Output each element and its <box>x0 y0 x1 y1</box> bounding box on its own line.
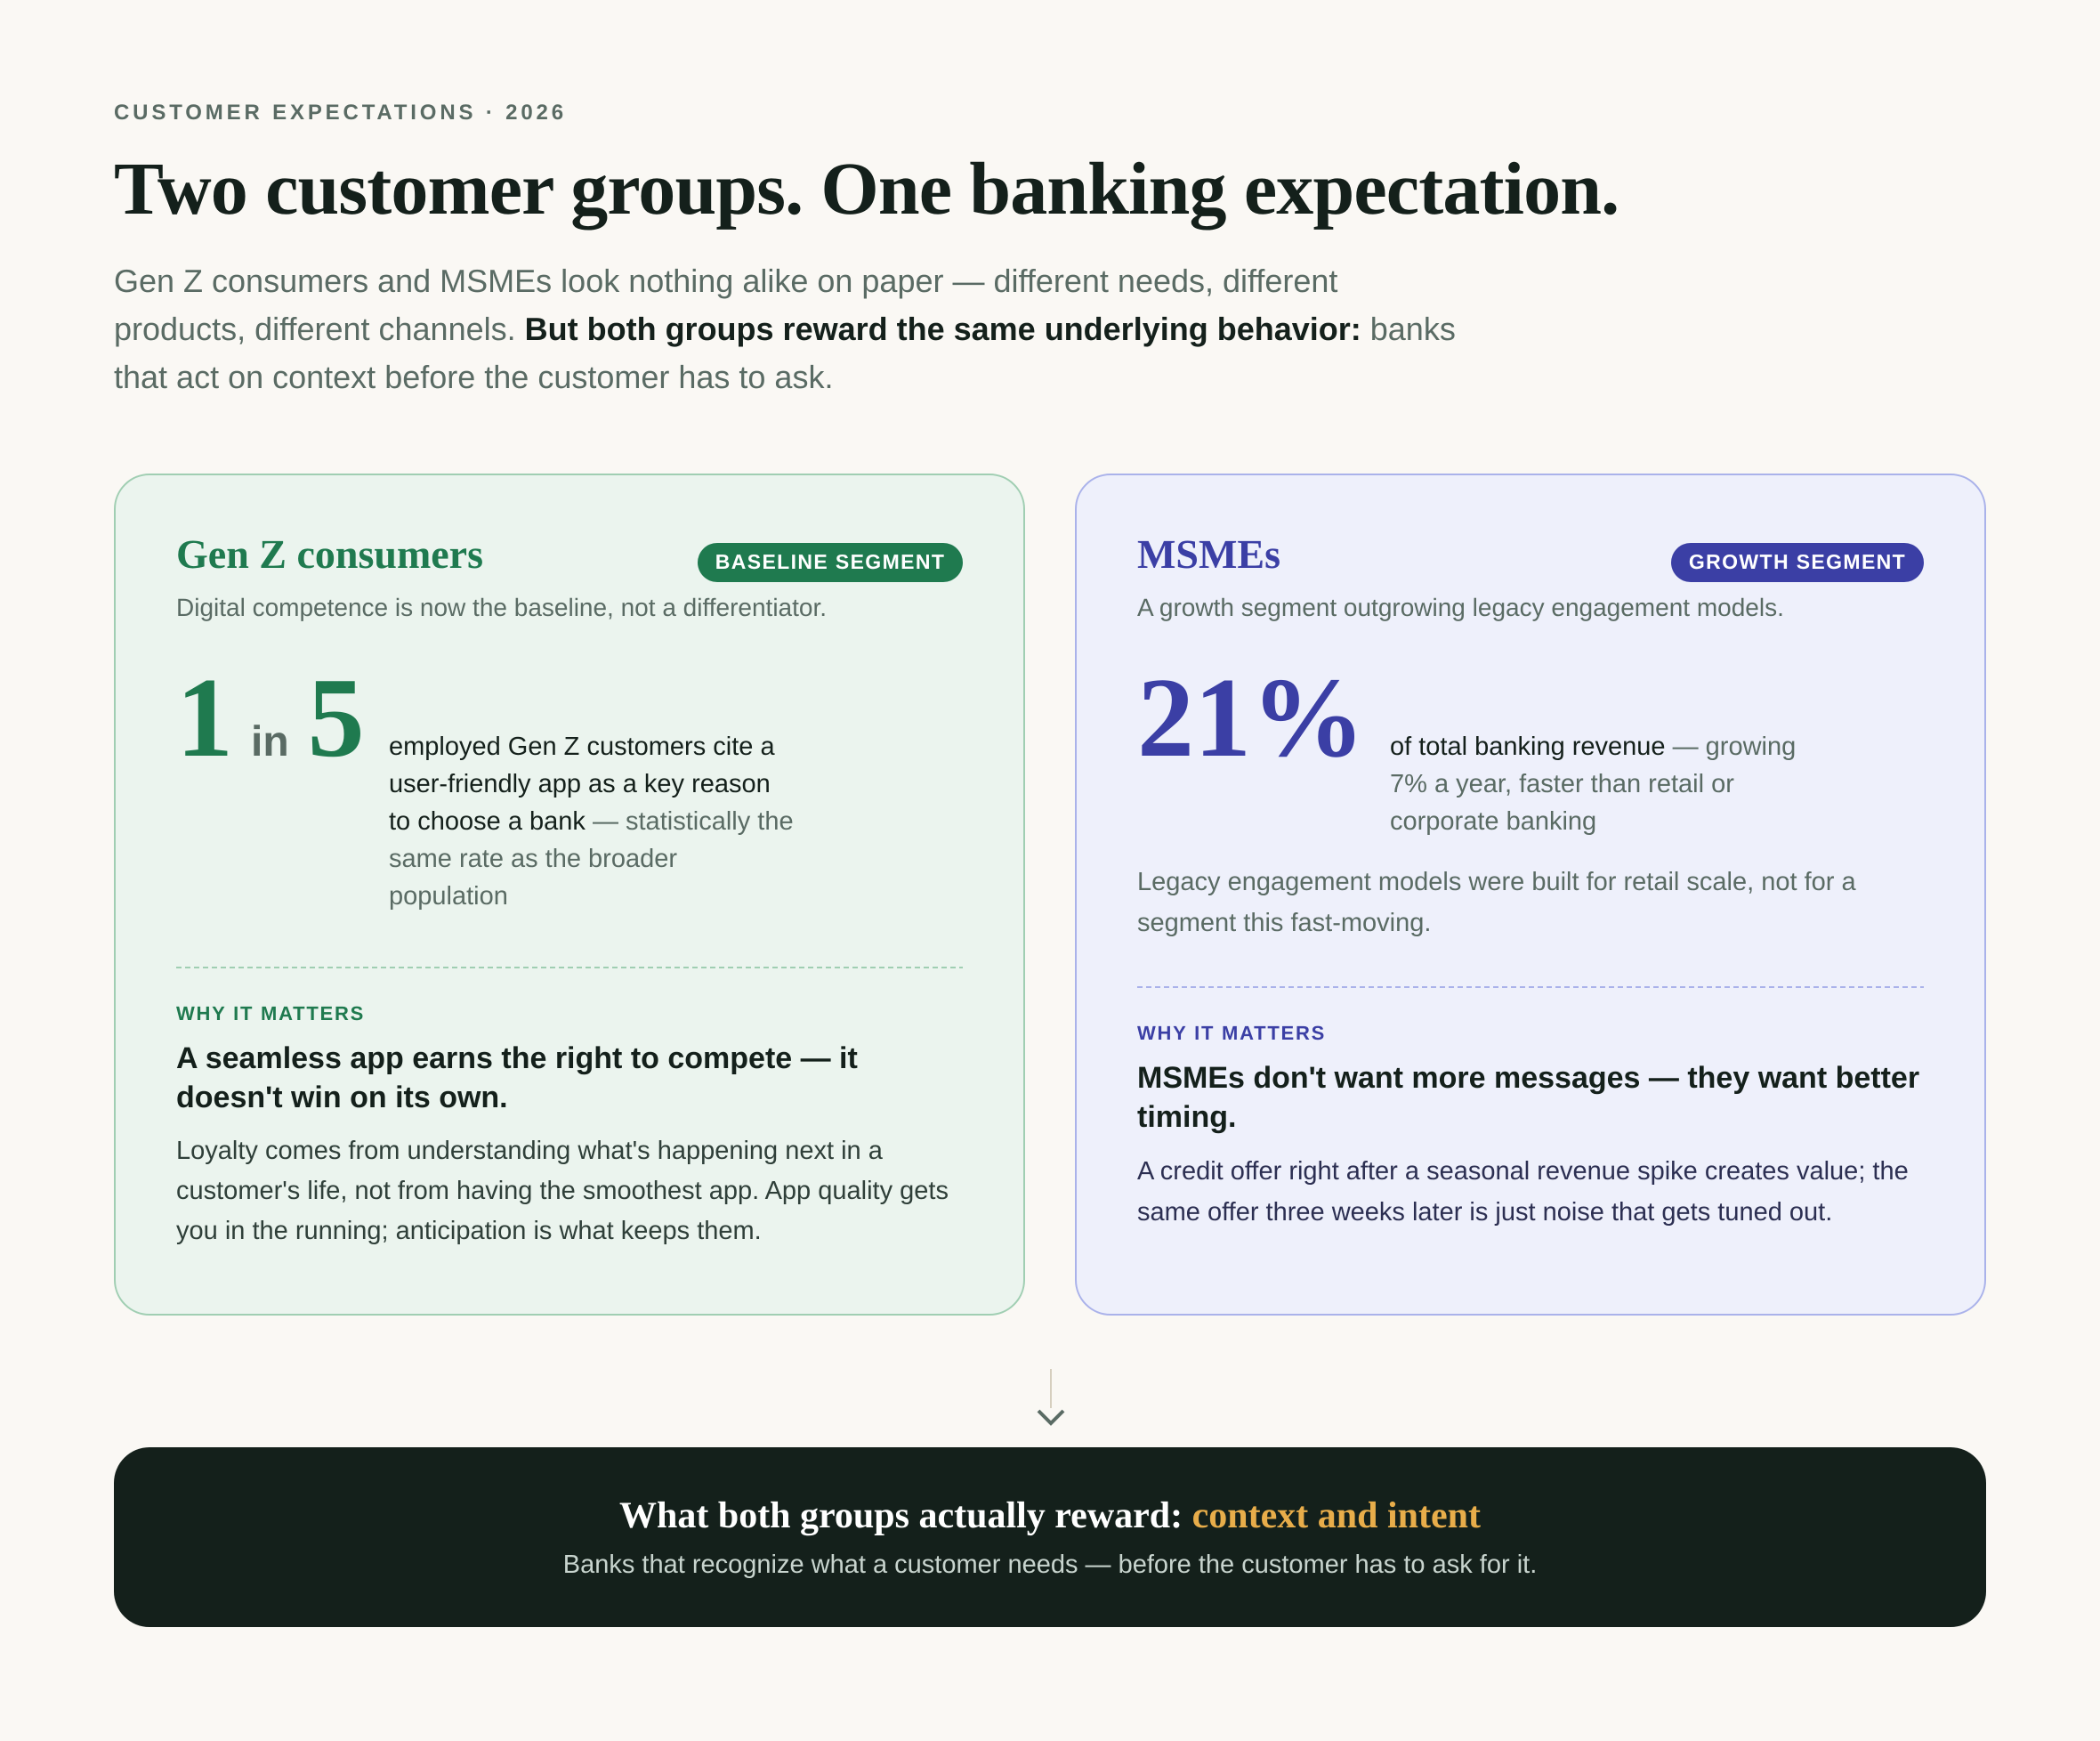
subtitle: Gen Z consumers and MSMEs look nothing alike on paper — different needs, different <box>114 263 1337 299</box>
why it matters body: customer's life, not from having the smoothest app. App quality gets <box>176 1177 949 1205</box>
label: why it matters: WHY IT MATTERS <box>176 1002 365 1024</box>
stat description: user-friendly app as a key reason <box>389 770 771 798</box>
stat description: population <box>389 882 508 911</box>
eyebrow: CUSTOMER EXPECTATIONS · 2026 <box>114 101 567 125</box>
legacy note <box>1137 868 1856 937</box>
why it matters heading: timing. <box>1137 1100 1236 1134</box>
legacy note: Legacy engagement models were built for retail scale, not for a <box>1137 868 1856 896</box>
why it matters body <box>176 1137 949 1245</box>
subtitle: products, different channels. But both groups reward the same underlying behavior: banks <box>114 311 1456 347</box>
stat description: same rate as the broader <box>389 845 677 873</box>
stat description <box>389 733 794 911</box>
panel subtitle: A growth segment outgrowing legacy engagement models. <box>1137 594 1784 621</box>
why it matters body: Loyalty comes from understanding what's happening next in a <box>176 1137 883 1165</box>
why it matters body <box>1137 1157 1909 1227</box>
big stat: 1 in 5: 1 in5 <box>176 654 365 781</box>
badge: growth segment <box>1671 543 1924 582</box>
panel subtitle: Digital competence is now the baseline, not a differentiator. <box>176 594 827 621</box>
legacy note: segment this fast-moving. <box>1137 909 1431 937</box>
stat description <box>1390 733 1796 836</box>
subtitle <box>114 263 1456 395</box>
stat description: corporate banking <box>1390 807 1596 836</box>
why it matters body: A credit offer right after a seasonal revenue spike creates value; the <box>1137 1157 1909 1186</box>
why it matters body: same offer three weeks later is just noise that gets tuned out. <box>1137 1198 1832 1227</box>
stat description: employed Gen Z customers cite a <box>389 733 775 761</box>
banner headline: What both groups actually reward: context and intent <box>619 1495 1481 1536</box>
why it matters heading <box>1137 1061 1919 1134</box>
why it matters body: you in the running; anticipation is what keeps them. <box>176 1217 762 1245</box>
panel heading: MSMEs: MSMEs <box>1137 531 1280 577</box>
stat description: 7% a year, faster than retail or <box>1390 770 1734 798</box>
big stat: 21%: 21% <box>1137 654 1365 781</box>
why it matters heading: A seamless app earns the right to compete — it <box>176 1041 858 1075</box>
subtitle: that act on context before the customer has to ask. <box>114 359 833 395</box>
badge: baseline segment: BASELINE SEGMENT <box>715 550 945 573</box>
title: Two customer groups. One banking expectation. <box>114 148 1619 231</box>
arrow: down to conclusion <box>1038 1369 1064 1426</box>
panel heading: Gen Z consumers: Gen Z consumers <box>176 531 483 577</box>
badge: growth segment: GROWTH SEGMENT <box>1689 550 1906 573</box>
why it matters heading: doesn't win on its own. <box>176 1081 508 1114</box>
badge: baseline segment <box>698 543 963 582</box>
banner subtext: Banks that recognize what a customer needs — before the customer has to ask for it. <box>563 1551 1537 1579</box>
stat description: of total banking revenue — growing <box>1390 733 1796 761</box>
panel: MSMEs <box>1075 474 1986 1316</box>
label: why it matters: WHY IT MATTERS <box>1137 1022 1326 1044</box>
panel: Gen Z consumers <box>114 474 1025 1316</box>
why it matters heading: MSMEs don't want more messages — they want better <box>1137 1061 1919 1095</box>
panel: conclusion banner <box>114 1447 1986 1627</box>
stat description: to choose a bank — statistically the <box>389 807 794 836</box>
why it matters heading <box>176 1041 858 1114</box>
